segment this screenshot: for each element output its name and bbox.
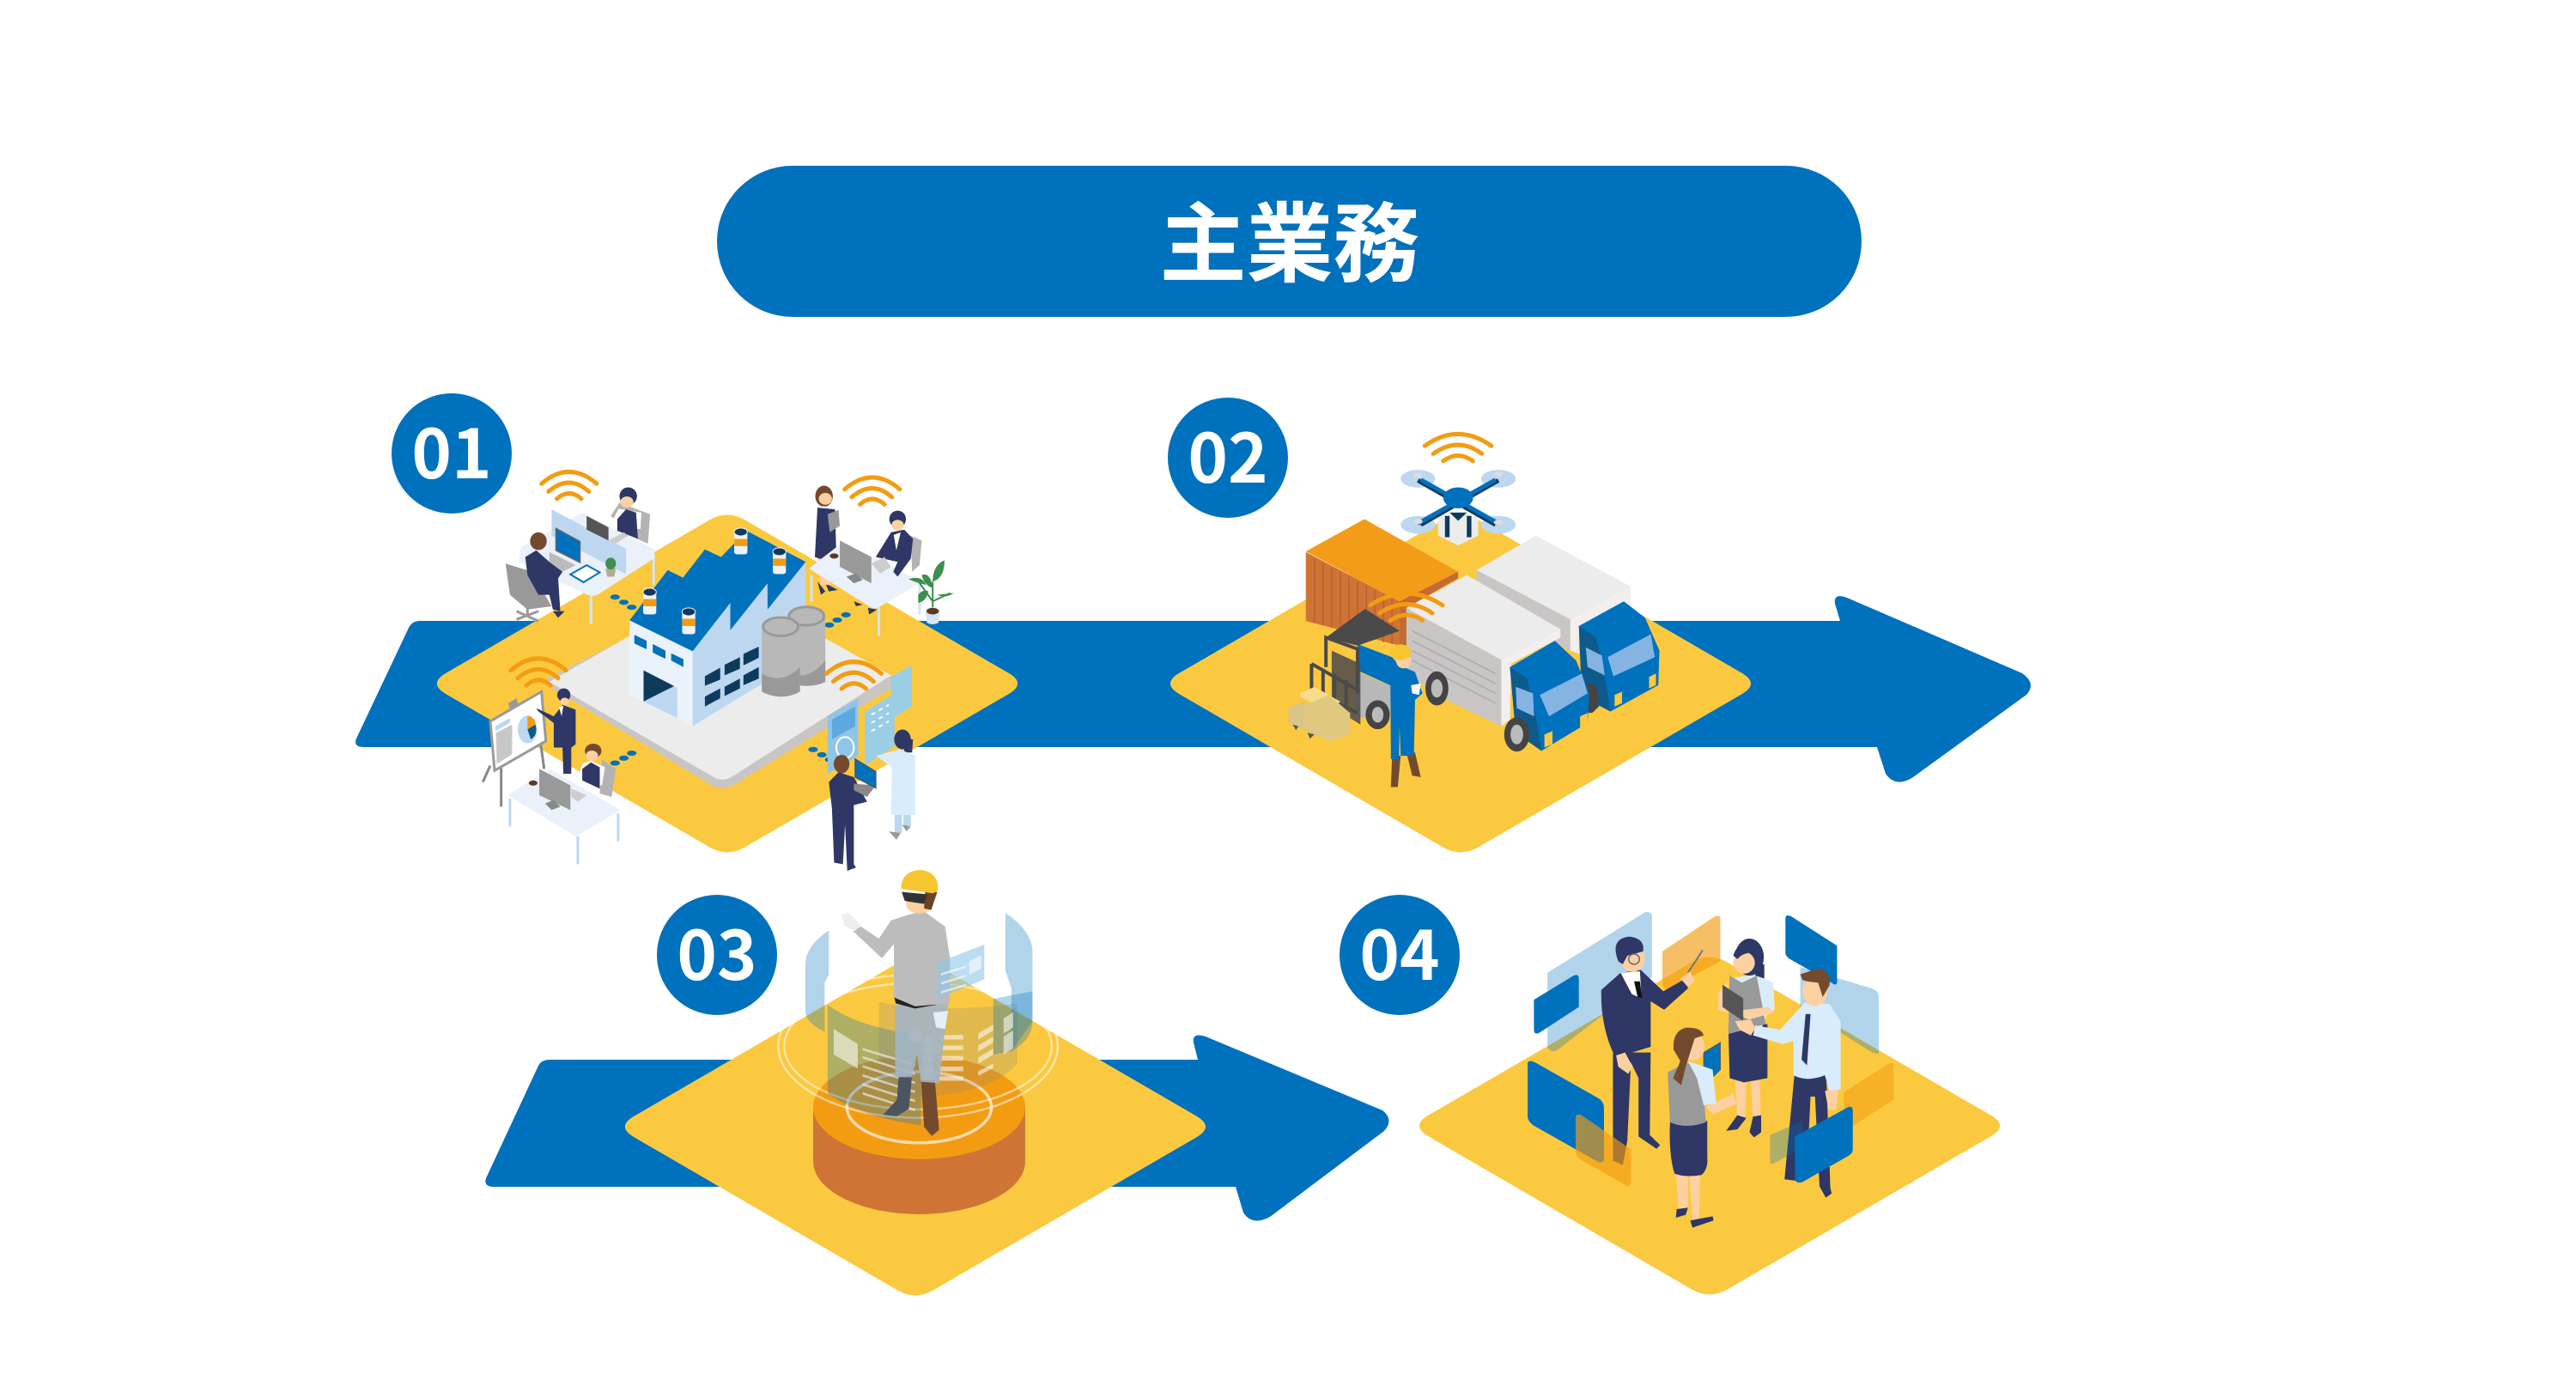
worker: [1390, 644, 1423, 787]
panel 03: smart glasses worker: [625, 870, 1206, 1295]
badge 02: 02: [1188, 404, 1268, 502]
diamond 01: [437, 515, 1018, 852]
woman with clipboard: [1718, 939, 1775, 1137]
office: top right: [809, 486, 954, 635]
cylinder base: [813, 1055, 1025, 1214]
title pill: [717, 166, 1862, 317]
badge 01: 01: [411, 399, 492, 498]
panel 01: factory and offices: [392, 393, 1018, 871]
forklift: [1311, 609, 1400, 729]
connection dots: [611, 594, 851, 766]
hologram panels back: [805, 913, 1032, 1125]
badge 03: 03: [677, 901, 757, 1000]
back floating panels: [1534, 912, 1879, 1054]
man with pointer: [1601, 937, 1703, 1165]
back truck: [1477, 536, 1660, 711]
woman from behind with tablet: [1668, 1028, 1736, 1228]
man in light blue shirt: [1735, 969, 1841, 1198]
illustration 02: [1289, 434, 1660, 787]
hologram rings: [778, 975, 1058, 1143]
tanks: [762, 606, 825, 696]
drone: [1400, 434, 1516, 545]
wifi icons: [511, 471, 900, 689]
panel 02: logistics: [1168, 398, 1751, 852]
panel 04: business team: [1340, 895, 2000, 1295]
arrow: lower row: [485, 1036, 1389, 1220]
badge 01: [392, 393, 512, 514]
floating data panel: [938, 945, 984, 999]
office: top left: [506, 487, 654, 624]
arrow: upper row: [355, 596, 2031, 782]
hologram details: [834, 1012, 1013, 1111]
illustration 01: [483, 471, 954, 871]
diamond 02: [1170, 515, 1751, 852]
office: bottom left with whiteboard: [483, 689, 620, 864]
cardboard boxes: [1289, 687, 1350, 742]
badge 03: [657, 895, 777, 1015]
diamond 04: [1419, 957, 2000, 1295]
factory platform: [547, 581, 891, 788]
wifi icon on forklift: [1370, 593, 1443, 620]
factory building: [629, 528, 805, 727]
shipping container: [1306, 520, 1458, 647]
badge 04: 04: [1359, 901, 1440, 1000]
badge 02: [1168, 398, 1288, 518]
front truck: [1406, 575, 1599, 751]
holographic panels and people: [828, 666, 915, 871]
title text: 主業務: [1159, 198, 1420, 294]
diamond 03: [625, 958, 1206, 1295]
badge 04: [1340, 895, 1460, 1015]
illustration 03: [778, 870, 1058, 1214]
illustration 04: [1528, 912, 1893, 1228]
front floating panels: [1528, 1061, 1893, 1186]
worker with VR headset: [841, 870, 950, 1136]
